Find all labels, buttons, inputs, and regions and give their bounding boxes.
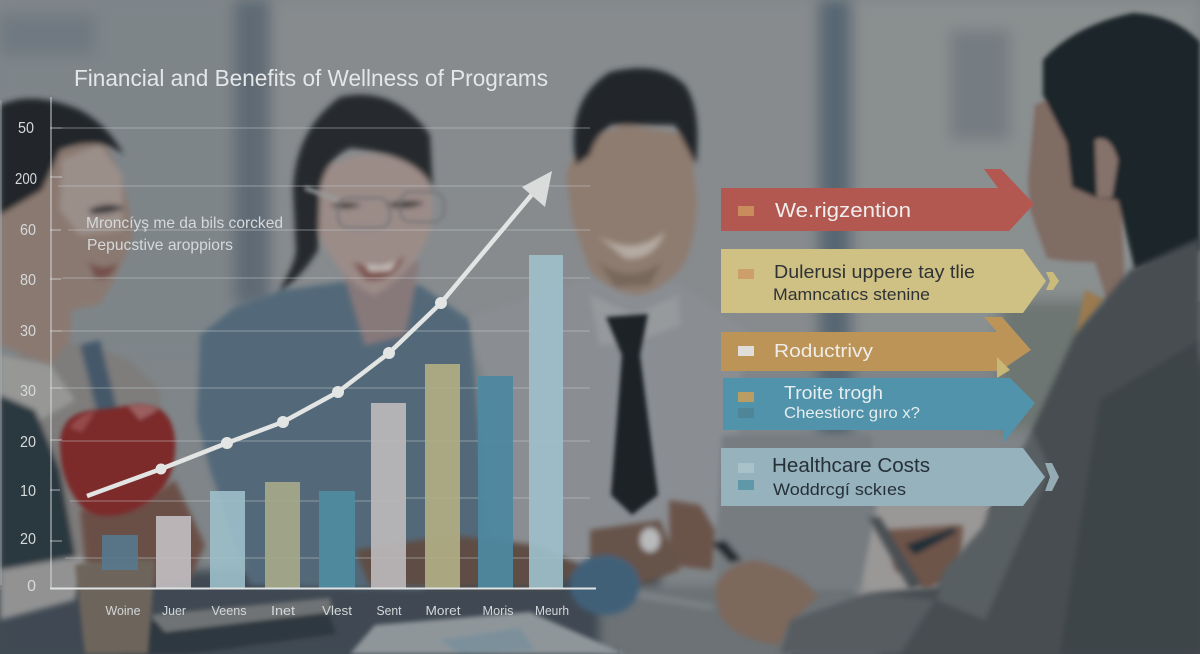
right woman <box>1028 13 1200 340</box>
y axis labels: 20 <box>20 531 36 548</box>
necktie <box>606 314 658 515</box>
blurred office windows <box>0 0 1200 440</box>
y axis labels: 50 <box>18 120 34 137</box>
y axis labels: 30 <box>20 383 36 400</box>
right man <box>470 68 745 565</box>
title: Financial and Benefits of Wellness of Programs <box>74 65 548 91</box>
y axis labels <box>15 120 37 595</box>
y axis labels: 60 <box>20 222 36 239</box>
axes <box>50 97 596 589</box>
arrow: blue benefit: Cheestiorc gıro x? <box>784 405 920 422</box>
hand holding apple <box>80 480 205 590</box>
arrow: yellow benefit <box>721 249 1059 313</box>
glasses <box>305 188 444 228</box>
table <box>0 500 990 654</box>
x axis labels: Sent <box>376 603 402 618</box>
chart note text <box>86 215 283 254</box>
notebook and papers <box>120 598 625 654</box>
x axis labels: Veens <box>212 603 247 618</box>
arrow: yellow benefit: Mamncatıcs stenine <box>773 286 930 304</box>
y axis labels: 0 <box>27 578 36 595</box>
coffee cup <box>75 560 155 654</box>
arrow: productivity: Roductrivy <box>774 340 874 361</box>
left person <box>0 99 170 620</box>
bars <box>102 255 563 588</box>
laptop, hands and phone <box>355 435 963 645</box>
x axis labels: Inet <box>271 603 295 618</box>
x axis labels: Moris <box>482 603 514 618</box>
arrow: blue benefit <box>723 357 1035 442</box>
chart: bars, axes and growth line <box>1 97 596 618</box>
growth line with arrow <box>87 171 552 496</box>
y axis labels: 20 <box>20 434 36 451</box>
x axis labels: Juer <box>162 603 187 618</box>
x axis labels: Meurh <box>535 603 569 618</box>
x axis labels: Woine <box>106 603 140 618</box>
y axis labels: 200 <box>15 171 37 188</box>
arrow: retention: We.rigzention <box>775 200 911 222</box>
y axis labels: 80 <box>20 272 36 289</box>
arrow: healthcare costs: Woddrcgí sckıes <box>773 480 906 499</box>
chart note text: Pepucstive aroppiors <box>87 237 233 254</box>
y axis labels: 10 <box>20 483 36 500</box>
arrow: productivity <box>721 317 1031 371</box>
x axis labels <box>106 603 569 618</box>
chart note text: Mroncíyş me da bils corcked <box>86 215 283 232</box>
icon: red apple <box>60 404 175 516</box>
jacket <box>780 238 1200 654</box>
x axis labels: Moret <box>426 603 461 618</box>
y axis labels: 30 <box>20 323 36 340</box>
arrow: yellow benefit: Dulerusi uppere tay tlie <box>774 262 975 282</box>
arrow: healthcare costs <box>721 448 1059 506</box>
base tones under blurred shapes <box>0 590 620 654</box>
middle person <box>197 95 490 590</box>
x axis labels: Vlest <box>322 603 352 618</box>
arrow: healthcare costs: Healthcare Costs <box>772 455 930 477</box>
arrow: retention <box>721 169 1034 231</box>
arrow: blue benefit: Troite trogh <box>784 383 883 403</box>
